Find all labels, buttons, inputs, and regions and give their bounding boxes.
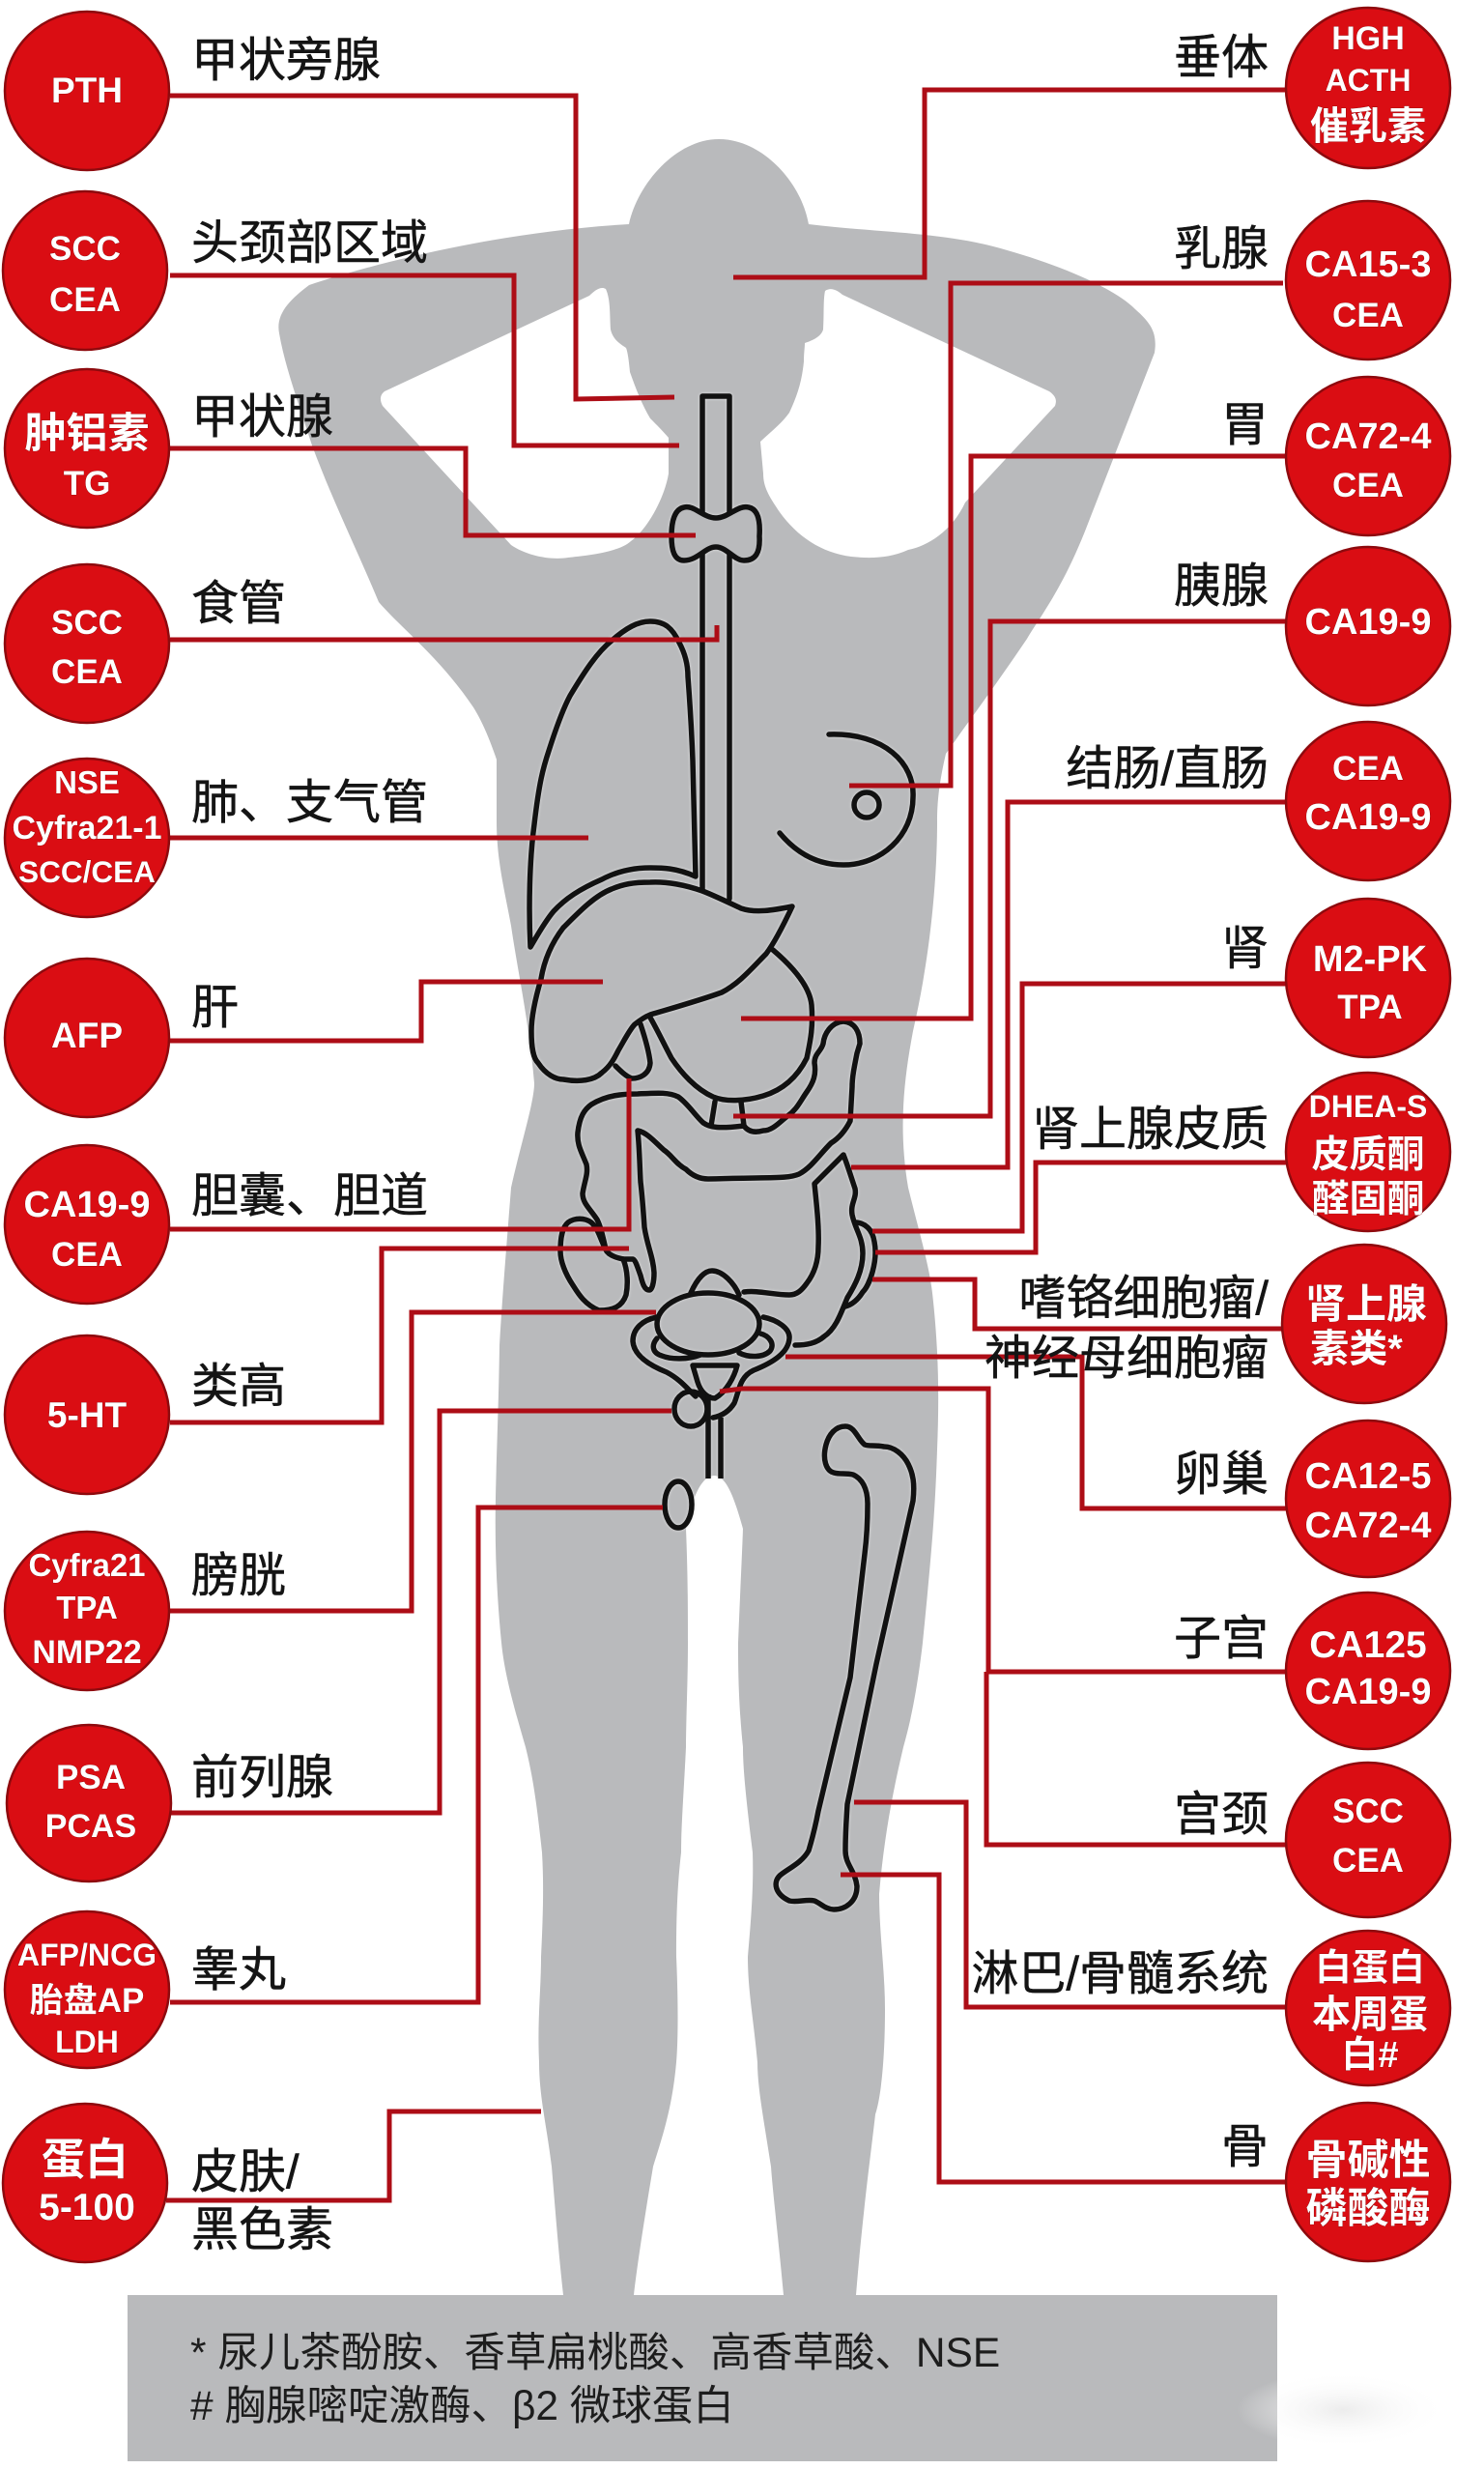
line: pheochromocytoma — [872, 1279, 1282, 1329]
marker circle: bone alkaline phosphatase: 磷酸酶 — [1306, 2186, 1430, 2232]
marker circle: AFP/NCG placental AP LDH: 胎盘AP — [30, 1982, 144, 2020]
label: bone: 骨 — [1221, 2121, 1269, 2173]
marker circle: protein S-100: 蛋白 — [42, 2135, 128, 2184]
label: kidney: 肾 — [1221, 923, 1269, 975]
marker circle: SCC CEA esophagus — [5, 564, 169, 723]
marker circle: AFP/NCG placental AP LDH: LDH — [55, 2024, 119, 2059]
anatomical organ outlines — [529, 396, 914, 1909]
line: stomach — [741, 456, 1287, 1019]
label: bladder: 膀胱 — [191, 1550, 286, 1602]
label: carcinoid: 类高 — [191, 1361, 286, 1413]
marker circle: DHEA-S cortisol aldosterone: 醛固酮 — [1311, 1179, 1425, 1220]
marker circle: calcitonin TG — [5, 369, 169, 528]
uterus fundus — [691, 1271, 739, 1295]
line: prostate — [170, 1411, 671, 1813]
thyroid — [671, 507, 759, 560]
marker circle: CA19-9 CEA gallbladder: CEA — [51, 1236, 123, 1274]
line: parathyroid — [170, 96, 674, 399]
label: prostate: 前列腺 — [191, 1752, 333, 1804]
line: pituitary — [733, 90, 1287, 277]
line: breast — [849, 283, 1283, 786]
gallbladder — [615, 1024, 650, 1078]
line: colorectum — [851, 802, 1287, 1167]
cervix — [693, 1365, 737, 1398]
marker circle: PTH: PTH — [51, 71, 123, 110]
pancreas and transverse colon — [578, 1021, 860, 1290]
marker circle: CA12-5 CA72-4: CA72-4 — [1305, 1506, 1431, 1546]
marker circle: CA125 CA19-9: CA19-9 — [1305, 1672, 1431, 1712]
marker circle: SCC CEA head and neck: SCC — [49, 230, 121, 268]
label: parathyroid: 甲状旁腺 — [191, 35, 381, 87]
pelvic outer contour — [633, 1317, 789, 1418]
line: thyroid — [170, 448, 696, 535]
marker circle: calcitonin TG: TG — [64, 465, 110, 502]
line: esophagus — [170, 625, 717, 640]
marker circle: CA19-9 pancreas — [1286, 547, 1450, 705]
marker circle: Cyfra21 TPA NMP22: Cyfra21 — [28, 1547, 146, 1583]
esophagus — [702, 396, 729, 899]
marker circle: SCC CEA esophagus: CEA — [51, 653, 123, 691]
label: esophagus: 食管 — [191, 578, 286, 630]
label: skin: 皮肤/ — [191, 2146, 300, 2198]
line: liver — [170, 982, 603, 1041]
marker circle: albumin Bence Jones protein — [1286, 1931, 1450, 2085]
footnote text — [190, 2331, 1000, 2429]
label: thyroid: 甲状腺 — [191, 391, 333, 444]
prostate — [674, 1392, 707, 1426]
kidney and cecum — [560, 1219, 627, 1310]
marker circle: bone alkaline phosphatase: 骨碱性 — [1306, 2138, 1430, 2184]
line: testis — [170, 1507, 663, 2002]
label: ovary: 卵巢 — [1174, 1449, 1269, 1501]
marker circle: PSA PCAS — [7, 1725, 171, 1881]
marker circle: PSA PCAS: PSA — [56, 1759, 126, 1796]
line: head and neck — [170, 275, 679, 445]
marker circle: NSE Cyfra21-1 SCC/CEA: SCC/CEA — [18, 854, 156, 889]
marker circle: SCC CEA head and neck: CEA — [49, 281, 121, 319]
marker circle: CA19-9 pancreas: CA19-9 — [1305, 602, 1431, 643]
marker circle: protein S-100: 5-100 — [39, 2187, 135, 2228]
marker circle: albumin Bence Jones protein: 白# — [1341, 2035, 1399, 2076]
label: pancreas: 胰腺 — [1174, 560, 1269, 613]
marker circle: CA12-5 CA72-4: CA12-5 — [1305, 1456, 1431, 1497]
breast — [780, 734, 913, 865]
liver — [531, 882, 792, 1080]
marker circle: bone alkaline phosphatase — [1286, 2103, 1450, 2261]
marker circle: Cyfra21 TPA NMP22: TPA — [56, 1590, 118, 1625]
human body silhouette — [278, 139, 1156, 2295]
marker circle: CA15-3 CEA — [1286, 201, 1450, 359]
line: skin — [166, 2111, 541, 2200]
marker circle: CA72-4 CEA: CEA — [1332, 467, 1404, 504]
marker circle: CA12-5 CA72-4 — [1286, 1421, 1450, 1577]
marker circle: catecholamines: 素类* — [1310, 1328, 1403, 1370]
marker circle: CA72-4 CEA — [1286, 377, 1450, 535]
marker circle: DHEA-S cortisol aldosterone: DHEA-S — [1309, 1089, 1427, 1124]
marker circle: AFP — [5, 959, 169, 1117]
line: lung — [170, 835, 588, 841]
stomach — [650, 950, 813, 1101]
marker circle: M2-PK TPA: M2-PK — [1313, 939, 1428, 980]
marker circle: NSE Cyfra21-1 SCC/CEA: Cyfra21-1 — [13, 810, 161, 847]
label: lung: 肺、支气管 — [191, 777, 428, 829]
marker circle: albumin Bence Jones protein: 本周蛋 — [1312, 1994, 1428, 2036]
pancreas duct — [711, 1102, 744, 1126]
marker circle: CA19-9 CEA gallbladder — [5, 1145, 169, 1304]
marker circle: AFP/NCG placental AP LDH: AFP/NCG — [17, 1938, 157, 1972]
footnote text: # 胸腺嘧啶激酶、β2 微球蛋白 — [190, 2384, 734, 2429]
label: testis: 睾丸 — [191, 1944, 286, 1996]
marker circle: SCC CEA cervix — [1286, 1763, 1450, 1917]
marker circle: SCC CEA head and neck — [3, 191, 167, 350]
line: bone — [841, 1875, 1287, 2182]
line: cervix — [986, 1672, 1287, 1845]
marker circle: 5-HT: 5-HT — [47, 1395, 128, 1435]
right labels — [971, 32, 1269, 2173]
marker circle: albumin Bence Jones protein: 白蛋白 — [1315, 1948, 1425, 1989]
marker circle: catecholamines — [1282, 1245, 1446, 1403]
label: neuroblastoma: 神经母细胞瘤 — [985, 1333, 1269, 1385]
line: pancreas — [733, 621, 1287, 1116]
marker circle: Cyfra21 TPA NMP22 — [5, 1532, 169, 1690]
marker circle: HGH ACTH prolactin — [1286, 8, 1450, 168]
marker circle: HGH ACTH prolactin: ACTH — [1326, 63, 1411, 98]
footer panel — [128, 2295, 1277, 2461]
marker circle: CA125 CA19-9: CA125 — [1309, 1624, 1427, 1666]
nipple — [854, 792, 879, 818]
marker circle: AFP/NCG placental AP LDH — [5, 1911, 169, 2068]
footnote text: * 尿儿茶酚胺、香草扁桃酸、高香草酸、NSE — [190, 2331, 1000, 2376]
left labels — [191, 35, 428, 2256]
marker circle: catecholamines: 肾上腺 — [1305, 1281, 1427, 1327]
marker circle: NSE Cyfra21-1 SCC/CEA: NSE — [54, 764, 120, 800]
femur — [776, 1426, 914, 1909]
line: adrenal cortex — [875, 1163, 1287, 1252]
marker circle: HGH ACTH prolactin: HGH — [1331, 20, 1405, 57]
marker circle: CEA CA19-9 colorectum: CA19-9 — [1305, 797, 1431, 838]
marker circle: AFP: AFP — [51, 1016, 123, 1055]
marker circle: CEA CA19-9 colorectum — [1286, 722, 1450, 880]
marker circle: PTH — [5, 12, 169, 170]
label: stomach: 胃 — [1221, 399, 1269, 451]
label: adrenal cortex: 肾上腺皮质 — [1032, 1104, 1269, 1156]
marker circle: CA19-9 CEA gallbladder: CA19-9 — [24, 1185, 150, 1225]
marker circle: CA72-4 CEA: CA72-4 — [1305, 416, 1431, 457]
bladder — [657, 1293, 759, 1355]
label: liver: 肝 — [191, 982, 239, 1034]
leader lines: right column — [720, 90, 1287, 2182]
label: uterus: 子宫 — [1174, 1613, 1269, 1665]
marker circle: 5-HT — [5, 1335, 169, 1494]
descending colon — [744, 1155, 863, 1345]
label: melanin: 黑色素 — [191, 2204, 333, 2256]
line: uterus — [720, 1389, 1287, 1672]
leader lines: left column — [166, 96, 717, 2200]
line: bladder — [170, 1312, 656, 1611]
lung — [529, 621, 696, 947]
label: gallbladder: 胆囊、胆道 — [191, 1170, 428, 1222]
pelvic inner contour — [653, 1334, 772, 1359]
testis — [665, 1481, 692, 1528]
marker circle: NSE Cyfra21-1 SCC/CEA — [5, 759, 169, 917]
marker circle: SCC CEA cervix: SCC — [1332, 1793, 1404, 1830]
marker circle: CA125 CA19-9 — [1286, 1593, 1450, 1749]
urethra — [708, 1394, 721, 1479]
line: lymph and marrow — [854, 1802, 1287, 2007]
marker circle: M2-PK TPA — [1286, 899, 1450, 1057]
label: breast: 乳腺 — [1174, 223, 1269, 275]
line: carcinoid — [170, 1249, 629, 1422]
marker circle: DHEA-S cortisol aldosterone — [1286, 1073, 1450, 1231]
marker circle: SCC CEA cervix: CEA — [1332, 1842, 1404, 1880]
line: kidney — [872, 984, 1287, 1231]
line: ovary — [785, 1357, 1287, 1508]
line: gallbladder — [170, 1078, 629, 1229]
marker circle: calcitonin TG: 肿铝素 — [25, 411, 149, 457]
label: pituitary: 垂体 — [1174, 32, 1269, 84]
marker circle: CA15-3 CEA: CEA — [1332, 297, 1404, 334]
label: colorectum: 结肠/直肠 — [1066, 743, 1269, 795]
label: cervix: 宫颈 — [1174, 1789, 1269, 1841]
marker circle: CA15-3 CEA: CA15-3 — [1305, 244, 1431, 285]
marker circle: M2-PK TPA: TPA — [1337, 989, 1403, 1026]
marker circle: HGH ACTH prolactin: 催乳素 — [1310, 105, 1426, 148]
label: pheochromocytoma: 嗜铬细胞瘤/ — [1018, 1273, 1269, 1325]
marker circle: DHEA-S cortisol aldosterone: 皮质酮 — [1311, 1134, 1425, 1176]
label: head and neck: 头颈部区域 — [191, 217, 428, 270]
label: lymph and marrow: 淋巴/骨髓系统 — [971, 1948, 1269, 2000]
marker circle: SCC CEA esophagus: SCC — [51, 604, 123, 642]
marker circle: protein S-100 — [3, 2104, 167, 2262]
marker circle: CEA CA19-9 colorectum: CEA — [1332, 750, 1404, 788]
marker circle: PSA PCAS: PCAS — [45, 1808, 136, 1845]
marker circle: Cyfra21 TPA NMP22: NMP22 — [32, 1634, 142, 1671]
right kidney crescent — [845, 1222, 875, 1306]
